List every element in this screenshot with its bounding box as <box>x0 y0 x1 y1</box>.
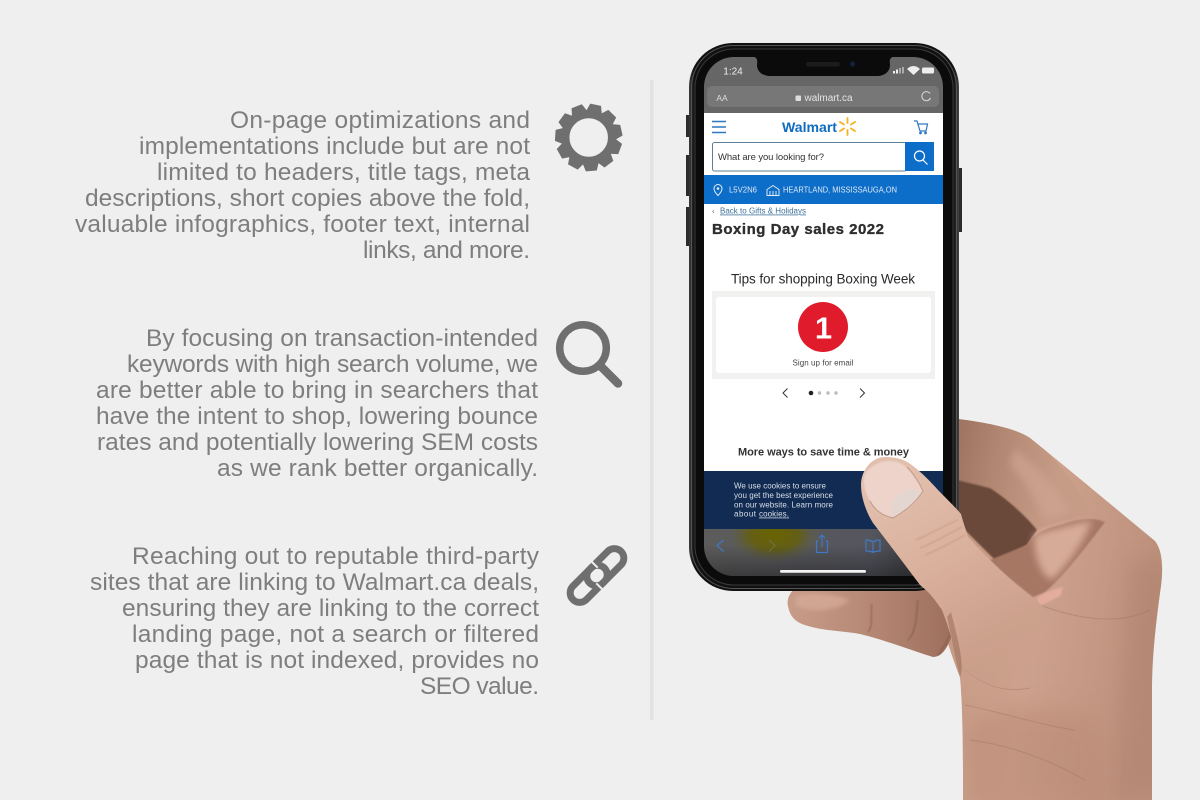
text block: third-party links: landing page, not a search or filtered <box>132 621 539 648</box>
cookie notice: about <box>734 510 757 518</box>
text block: transaction-intended keywords: rates and potentially lowering SEM costs <box>97 429 538 456</box>
text block: on-page optimizations: links, and more. <box>363 237 530 264</box>
cookie banner <box>704 471 943 529</box>
search box: What are you looking for? <box>718 152 824 163</box>
side buttons <box>686 115 962 246</box>
back link: ‹ <box>712 206 715 216</box>
page heading: Boxing Day sales 2022 <box>712 221 884 238</box>
location details: HEARTLAND, MISSISSAUGA,ON <box>783 186 897 194</box>
text block: on-page optimizations <box>75 107 530 264</box>
lower finger highlight <box>796 594 850 610</box>
back link: Back to Gifts & Holidays <box>720 206 806 216</box>
status icons <box>893 66 934 75</box>
speaker and camera <box>806 61 855 67</box>
cookie notice: you get the best experience <box>734 491 834 500</box>
text block: on-page optimizations: limited to headers, title tags, meta <box>157 159 530 186</box>
home indicator <box>780 570 866 573</box>
location details: L5V2N6 <box>729 186 758 194</box>
page background <box>704 113 943 471</box>
screen <box>704 57 943 576</box>
URL bar: AA <box>716 93 728 103</box>
carousel card: Sign up for email <box>792 358 854 368</box>
thumb <box>861 457 1052 730</box>
cookie notice: on our website. Learn more <box>734 500 834 510</box>
palm, wrist and back of the hand <box>930 418 1162 800</box>
hand behind phone <box>788 415 1175 800</box>
cookie notice <box>734 482 834 518</box>
text block: third-party links: ensuring they are linking to the correct <box>122 595 539 622</box>
text block: transaction-intended keywords: are better able to bring in searchers that <box>96 377 538 404</box>
carousel controls <box>783 388 864 398</box>
text block: transaction-intended keywords: have the intent to shop, lowering bounce <box>96 403 538 430</box>
side shadow by thumb base <box>947 612 962 677</box>
search box <box>712 142 934 171</box>
section heading: Tips for shopping Boxing Week <box>731 272 915 286</box>
nail edge shadow <box>870 467 923 518</box>
vertical divider <box>650 80 654 720</box>
text block: transaction-intended keywords: By focusing on transaction-intended <box>146 325 538 352</box>
toolbar icons <box>717 535 880 552</box>
lunula <box>891 490 921 517</box>
text block: on-page optimizations: On-page optimizations and <box>230 107 530 134</box>
cookie notice: cookies. <box>759 510 789 518</box>
lower finger knuckle shadows <box>868 600 952 655</box>
icon: chain link <box>563 542 631 609</box>
browser chrome <box>704 57 943 113</box>
nail <box>864 461 923 518</box>
browser toolbar <box>704 529 913 576</box>
thumb shape <box>861 457 1052 730</box>
phone body <box>689 43 959 591</box>
text block: transaction-intended keywords: keywords with high search volume, we <box>127 351 538 378</box>
text block: transaction-intended keywords: as we rank better organically. <box>217 455 538 482</box>
notch <box>752 56 895 76</box>
text block: on-page optimizations: descriptions, short copies above the fold, <box>85 185 530 212</box>
status time: 1:24 <box>723 66 743 78</box>
knuckle creases <box>916 520 965 555</box>
location details <box>714 184 897 196</box>
text block: third-party links: SEO value. <box>420 673 539 700</box>
carousel card: 1 <box>815 310 832 346</box>
hamburger menu <box>712 122 726 132</box>
carousel card <box>712 291 935 379</box>
phone <box>686 43 962 591</box>
lower finger <box>788 585 953 657</box>
text block: on-page optimizations: implementations include but are not <box>139 133 530 160</box>
cookie notice: We use cookies to ensure <box>734 482 827 490</box>
text block: transaction-intended keywords <box>96 325 538 482</box>
location bar <box>704 175 943 204</box>
cart icon <box>914 121 928 134</box>
shaded finger details <box>959 419 1162 800</box>
section heading: more ways: More ways to save time & money <box>738 446 910 458</box>
text block: third-party links: sites that are linking to Walmart.ca deals, <box>90 569 539 596</box>
text block: on-page optimizations: valuable infographics, footer text, internal <box>75 211 530 238</box>
olive glare <box>732 529 816 560</box>
URL bar <box>707 86 939 107</box>
icon: magnifying glass <box>560 325 618 384</box>
text block: third-party links: Reaching out to reputable third-party <box>132 543 540 570</box>
icon: gear <box>555 103 623 172</box>
URL bar: walmart.ca <box>804 93 853 104</box>
text block: third-party links: page that is not indexed, provides no <box>135 647 539 674</box>
text block: third-party links <box>90 543 540 700</box>
Walmart logo: Walmart <box>782 119 837 135</box>
